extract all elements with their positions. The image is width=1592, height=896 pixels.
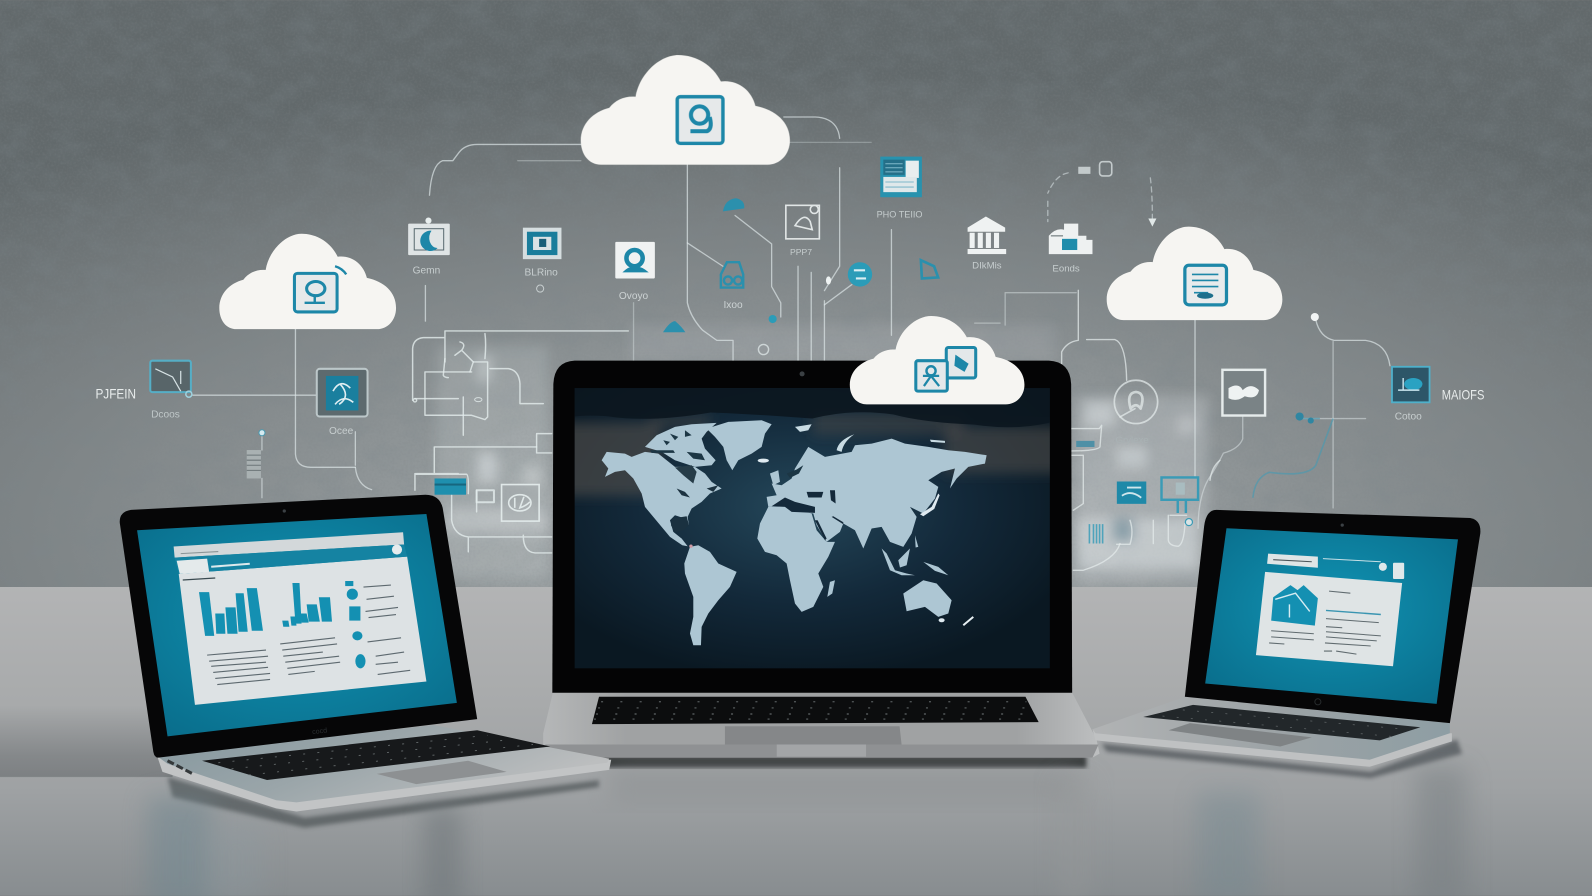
continent: eurasia [767,439,987,549]
background wall [0,0,1592,589]
label: MAIOFS: MAIOFS [1442,387,1484,403]
island: tasmania [939,618,945,622]
home button [1315,699,1321,705]
trackpad [377,761,507,784]
icon: teal cap upper [723,198,744,211]
base front edge [1092,729,1452,767]
icon: small teal node [769,315,777,323]
icon: server stack [247,430,265,478]
laptop: centre with world map [543,361,1100,758]
keyboard [1143,705,1420,740]
page teal bullets [345,581,366,668]
icon: teal dots [1296,412,1314,424]
map atmosphere clouds [548,388,1071,496]
laptop base [543,691,1100,758]
label: Ocee: Ocee [329,426,354,437]
icon: building [1049,224,1092,254]
side ports [168,761,193,774]
label: Dcoos: Dcoos [151,410,180,421]
icon: person badge [615,242,655,278]
camera [800,371,805,376]
water: great lakes [677,485,718,498]
label: Ixoo: Ixoo [723,300,743,311]
document page [1256,572,1402,666]
islands: south east asia [882,535,948,575]
icon: right outlined tile [1222,370,1265,416]
soft bokeh lights behind the laptops [437,325,1208,584]
island: madagascar [827,580,835,597]
continent: greenland [707,420,772,470]
icon: small ring [537,285,544,292]
icon: crescent card [408,218,450,255]
brand mark: cocd [312,727,328,736]
house graphic [1271,585,1318,626]
icon: swirl [758,344,769,355]
island: iceland [758,459,769,463]
icon: paired cards in centre cloud [916,347,976,391]
laptop base [156,725,609,802]
table surface [0,587,1592,896]
world map [602,420,987,645]
continent: australia [903,580,952,617]
icon: arrow into right cloud [1148,219,1156,227]
laptop base [1092,697,1450,760]
icon: boxed teal tile [317,369,368,417]
trackpad [725,726,902,744]
screen bezel [1185,510,1480,723]
icon: teal photo tile [1117,482,1146,504]
keyboard [592,697,1039,724]
web page [174,532,426,705]
label: Ovoyo: Ovoyo [619,291,649,302]
page text lines [207,585,410,685]
laptop: left with dashboard [120,495,611,811]
icon: person ring [1114,380,1158,424]
icon: map pin card in left cloud [294,266,346,312]
camera [283,509,286,513]
icon: contact card in top cloud [677,97,723,143]
icon: teal bracket [921,260,938,278]
laptop: right with document [1092,510,1480,767]
icon: right dark teal tile [1392,367,1430,402]
island: new zealand [963,617,973,625]
water: red sea and gulf [815,516,843,540]
network icons and labels [95,157,1484,478]
label: Grylexe: Grylexe [1115,435,1149,446]
icon: framed picture [523,228,561,259]
label: PPP7: PPP7 [790,247,812,257]
teal screen [137,514,457,736]
camera [1341,524,1344,527]
label: Cotoo: Cotoo [1395,412,1422,423]
network connector lines [193,117,1390,528]
label: BLRino: BLRino [525,267,558,278]
icon: left screen panel [150,361,192,397]
cloud: left [219,234,396,329]
continent: north america [602,452,722,546]
cloud: centre [850,316,1024,404]
label: PHO TEIIO: PHO TEIIO [877,210,923,220]
icon: white pin dot [1311,313,1319,321]
label: Eonds: Eonds [1052,263,1080,274]
icon: small swirl node [1185,519,1192,526]
bar chart: second [282,583,332,627]
screen bezel [120,495,477,758]
label: DIkMis: DIkMis [972,260,1002,271]
icon: outlined pin box [786,205,819,239]
water: hudson bay [675,465,697,484]
water: gulf of mexico [671,516,689,532]
water: baltic and arctic gaps [650,430,803,478]
icon: teal circle node [848,262,872,287]
label: Gemn: Gemn [413,265,440,276]
teal connector lines [1253,419,1333,498]
islands: arctic [795,424,945,452]
map display [575,388,1050,668]
document text lines [1269,591,1381,654]
teal screen [1205,528,1458,704]
icon: teal document panel [880,157,922,197]
icon: tiny tag [1078,162,1112,176]
screen bezel [552,361,1072,693]
icon: teal barcode [1089,524,1103,543]
continent: africa [757,507,835,612]
hinge notch [777,744,866,757]
base front lip [545,744,1099,758]
map marker [689,545,693,548]
island: japan [920,494,940,516]
cloud: top [581,55,790,165]
icon: teal lock [721,262,743,288]
bar chart: first [199,588,263,636]
circuit cluster left of centre laptop [413,331,628,553]
icon: teal cap lower [663,321,685,332]
header tag [1267,554,1318,568]
island: britain [770,470,780,485]
icon: teal tray in circuit [435,478,466,495]
circuit cluster right of centre laptop [1062,290,1220,570]
water: mediterranean and inland seas [772,490,836,513]
icon: document in right cloud [1185,265,1226,305]
icon: temple [968,217,1006,254]
icon: outlined symbol tile [502,485,539,521]
base front edge [157,757,611,811]
icon: teal outlined monitor [1162,477,1198,513]
keyboard [202,730,550,780]
continent: canadian arctic [645,423,717,467]
continent: south america [684,545,737,645]
icon: white drop [826,276,831,285]
header detail [1273,559,1404,579]
label: PJFEIN: PJFEIN [95,386,136,402]
table shadows and reflections [0,706,1467,896]
icon: small glass tray [1076,441,1094,447]
trackpad [1169,723,1312,746]
cloud: right [1107,227,1282,320]
